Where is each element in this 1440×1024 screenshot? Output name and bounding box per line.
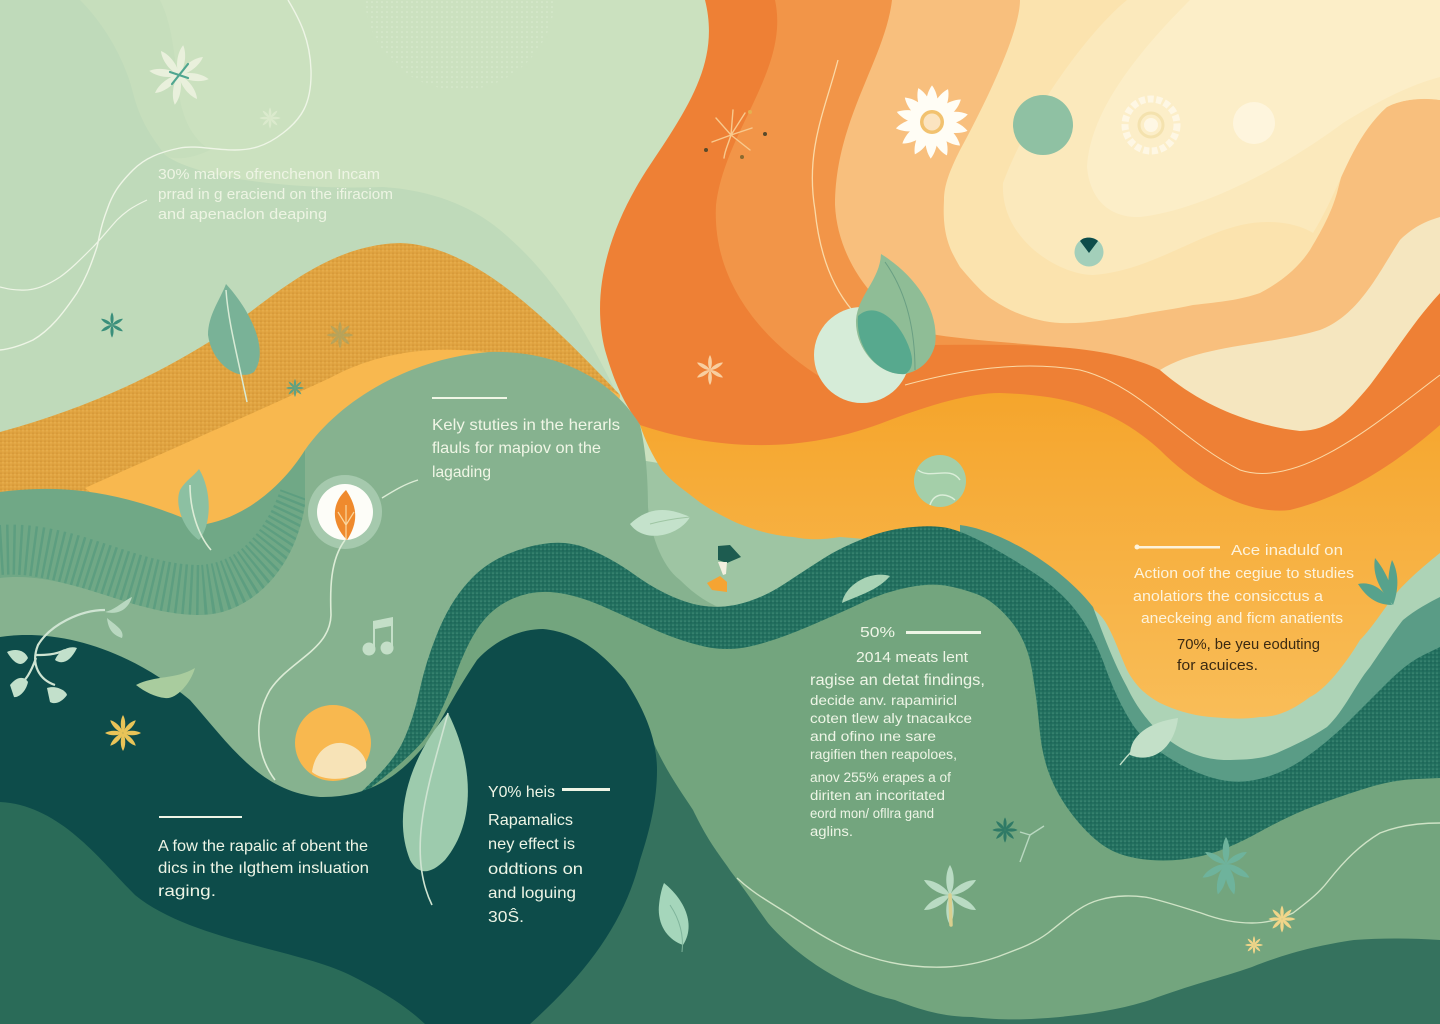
- icon: small star top: [260, 108, 280, 128]
- callout: central hill: [432, 397, 620, 481]
- icon: pale asterisk: [696, 355, 724, 385]
- icon: firework burst: [704, 110, 767, 159]
- icon: bottom flower: [922, 865, 978, 925]
- callout: green field findings: aglins.: [810, 824, 853, 839]
- yellow hill: [85, 350, 620, 560]
- wave: orange band on right: [820, 293, 1440, 508]
- callout: dark teal centre: 30Ŝ.: [488, 907, 524, 926]
- callout: yellow right: Action oof the cegiue to studies: [1134, 565, 1354, 582]
- icon: sun ring: [1125, 99, 1177, 151]
- icon: teal star: [100, 312, 124, 338]
- callout: green field findings: ragise an detat findings,: [810, 672, 985, 689]
- wave: light peach: [944, 0, 1440, 323]
- callout: dark teal left: dics in the ılgthem insluation: [158, 860, 369, 877]
- bottom dark green wave: [500, 735, 1440, 1024]
- callout: dark teal left: raging.: [158, 883, 216, 900]
- callout: yellow right: 70%, be yeu eoduting: [1177, 636, 1320, 653]
- wave: cream: [1003, 0, 1440, 275]
- icon: leaf bottom: [659, 883, 689, 952]
- callout: dark teal centre: Rapamalics: [488, 812, 573, 829]
- callout: green field findings: coten tlew aly tnacaıkce: [810, 711, 972, 726]
- icon: sun circle: [295, 705, 371, 781]
- callout: green field findings: [810, 624, 985, 839]
- connector: badge to sun: [259, 540, 345, 780]
- callout: central hill: flauls for mapiov on the: [432, 440, 601, 457]
- icon: pale star: [1245, 936, 1263, 954]
- icon: mustard star: [326, 322, 354, 348]
- wave: lower cream: [1160, 217, 1440, 431]
- icon: faint leaf: [1233, 102, 1275, 144]
- icon: small green star: [286, 379, 304, 397]
- thin line: bottom right: [737, 823, 1440, 967]
- icon: leaf on ribbon: [842, 575, 890, 603]
- icon: leaf left upper: [208, 284, 260, 402]
- icon: music notes: [362, 617, 394, 656]
- textured dark green ribbon: [360, 526, 1440, 920]
- dotted circle top: [365, 0, 555, 90]
- callout: yellow right: [1133, 542, 1354, 674]
- icon: hourglass figure: [707, 545, 741, 592]
- icon: twig: [1020, 826, 1044, 862]
- text block: top left callout: [158, 167, 393, 223]
- callout: yellow right: Ace inadulɗ on: [1231, 542, 1343, 559]
- thin line: top left curl: [0, 0, 311, 350]
- icon: flower top left: [145, 41, 213, 109]
- stripes on left band: [0, 498, 304, 590]
- wave: deep orange: [600, 0, 1440, 560]
- green hill: central: [0, 352, 727, 860]
- green band: left: [0, 450, 305, 700]
- icon: branch: [7, 597, 132, 703]
- icon: flame badge: [308, 475, 382, 549]
- callout: green field findings: 2014 meats lent: [856, 649, 969, 666]
- callout: yellow right: anolatiors the consicctus a: [1133, 588, 1324, 605]
- icon: small dark star: [992, 817, 1018, 843]
- wave: mid orange: [716, 0, 1440, 400]
- icon: leaf lower right: [1120, 718, 1178, 765]
- mint band near centre: [640, 460, 1010, 800]
- icon: leaf on mint: [630, 510, 690, 536]
- text block: top left callout: and apenaclon deaping: [158, 207, 327, 223]
- panel: warm sun waves: [600, 0, 1440, 560]
- mint band on right: [1000, 520, 1440, 800]
- dark teal hill: [0, 629, 657, 1024]
- text block: top left callout: prrad in g eraciend on the ifiraciom: [158, 187, 393, 203]
- callout: dark teal left: [158, 816, 369, 900]
- thin line: orange wave: [812, 60, 852, 310]
- icon: globe: [914, 455, 966, 507]
- callout: dark teal left: A fow the rapalic af obent the: [158, 838, 368, 855]
- callout: central hill: Kely stuties in the herarls: [432, 417, 620, 434]
- yellow orange wave: [640, 393, 1440, 719]
- callout: green field findings: ragifien then reapoloes,: [810, 747, 957, 762]
- icon: leaf on dark teal: [136, 668, 195, 698]
- callout: yellow right: aneckeing and ficm anatients: [1141, 610, 1343, 627]
- thin line: right orange wave: [905, 366, 1440, 474]
- thin line: lower curl: [0, 200, 147, 290]
- icon: teal flower: [1201, 837, 1251, 895]
- mustard textured hill: [0, 243, 620, 520]
- background: soft left blob: [0, 0, 620, 440]
- main green field: [360, 585, 1440, 1024]
- teal band on right: [960, 525, 1440, 800]
- icon: mint circle with leaf: [814, 254, 936, 403]
- icon: leaf left lower: [178, 469, 211, 550]
- callout: dark teal centre: ney effect is: [488, 836, 575, 853]
- wave: peach: [835, 0, 1440, 420]
- callout: green field findings: and ofino ıne sare: [810, 729, 936, 744]
- callout: dark teal centre: Y0% heis: [488, 784, 555, 801]
- icon: leaf cluster: [1358, 558, 1397, 605]
- callout: green field findings: eord mon/ ofllra gand: [810, 806, 934, 821]
- icon: yellow star: [105, 715, 141, 751]
- callout: dark teal centre: and loguing: [488, 885, 576, 902]
- callout: green field findings: 50%: [860, 624, 895, 641]
- callout: central hill: lagading: [432, 464, 491, 481]
- icon: green circle: [1013, 95, 1073, 155]
- background: soft left tint: [0, 0, 210, 200]
- text block: top left callout: 30% malors ofrenchenon Incam: [158, 167, 380, 183]
- icon: daisy: [895, 85, 969, 159]
- connector: badge to callout: [382, 480, 418, 498]
- wave: palest highlight: [1087, 0, 1440, 217]
- callout: green field findings: anov 255% erapes a of: [810, 770, 951, 785]
- icon: yellow star small: [1268, 906, 1296, 932]
- callout: dark teal centre: [488, 784, 610, 926]
- icon: large leaf: [403, 713, 468, 905]
- icon: small pie: [1074, 238, 1104, 266]
- callout: yellow right: for acuices.: [1177, 657, 1258, 674]
- lower left green wave: [0, 802, 425, 1024]
- callout: green field findings: decide anv. rapamiricl: [810, 693, 957, 708]
- callout: dark teal centre: oddtions on: [488, 861, 583, 878]
- callout: green field findings: diriten an incoritated: [810, 788, 945, 803]
